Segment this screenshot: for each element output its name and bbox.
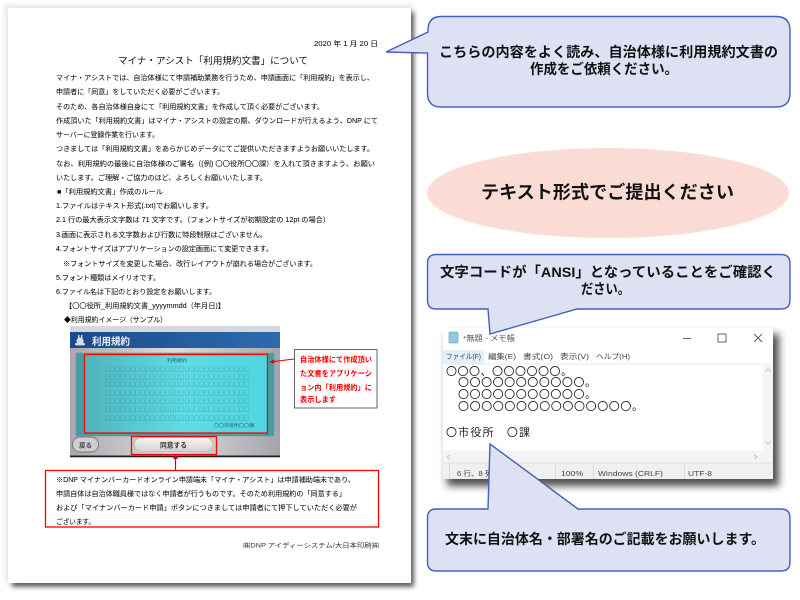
rules list: 【〇〇役所_利用規約文書_yyyymmdd（年月日)】 [65, 301, 225, 310]
red callout: terms explanation: 自治体様にて作成頂い [300, 354, 372, 364]
introduction paragraph: いたします。ご理解・ご協力のほど、よろしくお願いいたします。 [56, 173, 267, 182]
menu bar: 表示(V) [560, 352, 589, 361]
terms panel: □□□□□□□□□□□□□□□□□□□□□□□□□□□□□ [105, 366, 249, 373]
introduction paragraph: なお、利用規約の最後に自治体様のご署名（(例) 〇〇役所〇〇課）を入れて頂きますよう、お願い [56, 159, 375, 168]
arrow: note to agree button [173, 454, 178, 470]
menu bar: 書式(O) [523, 352, 553, 361]
ellipse: submit as text format: テキスト形式でご提出ください [481, 182, 734, 202]
rules list: 1.ファイルはテキスト形式(.txt)でお願いします。 [56, 201, 213, 210]
rules list: ※フォントサイズを変更した場合、改行レイアウトが崩れる場合がございます。 [63, 259, 317, 268]
rules list: 4.フォントサイズはアプリケーションの設定画面にて変更できます。 [56, 244, 273, 253]
callout: read the content [386, 16, 790, 107]
terms panel: □□□□□□□□□□□□□□□□□□□□□□□□□□□□□ [105, 381, 249, 388]
agree button: 同意する [160, 440, 187, 450]
terms panel: 〇〇市役所〇〇課 [214, 422, 254, 429]
document text [56, 39, 378, 324]
notepad body text: 〇〇〇、〇〇〇〇〇〇。 [446, 363, 572, 379]
highlight: agree button [132, 436, 216, 454]
rules list: 6.ファイル名は下記のとおり設定をお願いします。 [56, 287, 216, 296]
back button [72, 437, 98, 452]
callout: read the content: 作成をご依頼ください。 [530, 61, 678, 77]
icon: mascot [75, 335, 85, 345]
callout: check ANSI encoding: 文字コードが「ANSI」となっていることをご確認く [440, 264, 776, 280]
notepad body text: 〇〇〇〇〇〇〇〇〇〇〇。 [458, 386, 596, 402]
introduction paragraph: つきましては「利用規約文書」をあらかじめデータにてご提供いただきますようお願いいたします。 [56, 144, 374, 153]
rules list [56, 187, 330, 324]
rules list: ◆利用規約イメージ（サンプル） [64, 315, 167, 324]
status bar [443, 463, 773, 479]
footer company name: ㈱DNP アイディーシステム/大日本印刷㈱ [243, 540, 380, 550]
rules list: 5.フォント種類はメイリオです。 [56, 273, 160, 282]
menu bar [443, 350, 630, 364]
terms panel [76, 353, 274, 436]
terms panel: 利用規約 [167, 357, 187, 364]
red callout: terms explanation: た文書をアプリケーシ [300, 368, 372, 378]
notepad window [443, 328, 779, 486]
menu bar: ヘルプ(H) [596, 352, 630, 361]
callout: check ANSI encoding [428, 254, 790, 334]
red box: notice: ございます。 [56, 517, 95, 526]
introduction paragraph: 作成頂いた「利用規約文書」はマイナ・アシストの設定の際、ダウンロードが行えるよう、DNP にて [56, 116, 378, 125]
introduction paragraph: 申請者に「同意」をしていただく必要がございます。 [56, 87, 224, 96]
notepad body text: 〇〇〇〇〇〇〇〇〇〇〇〇〇〇〇。 [458, 398, 643, 414]
red box: notice [46, 470, 378, 527]
status bar: UTF-8 [688, 469, 712, 478]
callout: read the content: こちらの内容をよく読み、自治体様に利用規約文書の [439, 44, 778, 60]
terms panel: □□□□□□□□□□□□□□□□□□□□□□□□□□□□□ [105, 398, 249, 405]
scrollbars [443, 364, 773, 463]
red callout: terms explanation: ョン内「利用規約」に [300, 382, 372, 392]
rules list: 3.画面に表示される文字数および行数に特段制限はございません。 [56, 230, 267, 239]
terms panel: □□□□□□□□□□□□□□□□□□□□□□□□□□□□□ [105, 390, 249, 397]
menu bar: 編集(E) [488, 352, 516, 361]
introduction paragraph: そのため、各自治体様自身にて「利用規約文書」を作成して頂く必要がございます。 [56, 102, 324, 111]
callout: add municipality name at end: 文末に自治体名・部署名のご記載をお願いします。 [445, 531, 765, 547]
red box: notice: ※DNP マイナンバーカードオンライン申請端末「マイナ・アシスト」は申請補助端末であり、 [56, 475, 355, 484]
notepad body text [446, 363, 643, 440]
window controls [683, 334, 762, 342]
ellipse: submit as text format [427, 148, 789, 238]
introduction paragraph: マイナ・アシストでは、自治体様にて申請補助業務を行うため、申請画面に「利用規約」を表示し、 [56, 73, 374, 82]
red box: notice: および「マイナンバーカード申請」ボタンにつきましては申請者にて押下していただく必要が [56, 503, 357, 512]
screen heading: 利用規約 [92, 335, 130, 348]
agree button [134, 438, 212, 452]
red callout: terms explanation: 表示します [300, 394, 336, 404]
callout: add municipality name at end [428, 444, 790, 571]
notepad body text: 〇〇〇〇〇〇〇〇〇〇〇。 [458, 374, 596, 390]
terms panel: □□□□□□□□□□□□□□□□□□□□□□□□□□□□□ [105, 406, 249, 413]
highlight: terms area [84, 354, 268, 433]
icon: notepad [449, 332, 458, 343]
introduction paragraph [56, 73, 378, 182]
notepad title: *無題 - メモ帳 [463, 333, 515, 343]
back button: 戻る [79, 442, 92, 450]
document title: マイナ・アシスト「利用規約文書」について [118, 55, 308, 67]
screen header band [70, 332, 280, 348]
arrow: callout to terms area [269, 359, 294, 364]
notepad body text: 〇市役所 〇課 [446, 424, 530, 440]
callout: check ANSI encoding: ださい。 [581, 281, 630, 297]
status bar: Windows (CRLF) [598, 469, 664, 478]
introduction paragraph: サーバーに登録作業を行います。 [56, 130, 159, 139]
status bar: 6 行、8 列 [457, 468, 492, 478]
menu bar: ファイル(F) [446, 352, 481, 361]
date: 2020 年 1 月 20 日 [314, 39, 378, 48]
status bar: 100% [561, 469, 583, 478]
rules list: 2.1 行の最大表示文字数は 71 文字です。（フォントサイズが初期設定の 12pt の場合） [56, 215, 330, 224]
rules list: ■「利用規約文書」作成のルール [57, 187, 163, 196]
red callout: terms explanation [294, 350, 377, 408]
terms panel: □□□□□□□□□□□□□□□□□□□□□□□□□□□□□ [105, 415, 249, 422]
terms panel: □□□□□□□□□□□□□□□□□□□□□□□□□□□□□ [105, 374, 249, 381]
sample screenshot: terms of use screen [70, 326, 280, 457]
red box: notice: 申請自体は自治体職員様ではなく申請者が行うものです。そのため利用規約の「同意する」 [56, 489, 346, 498]
panel: document page [5, 5, 414, 587]
